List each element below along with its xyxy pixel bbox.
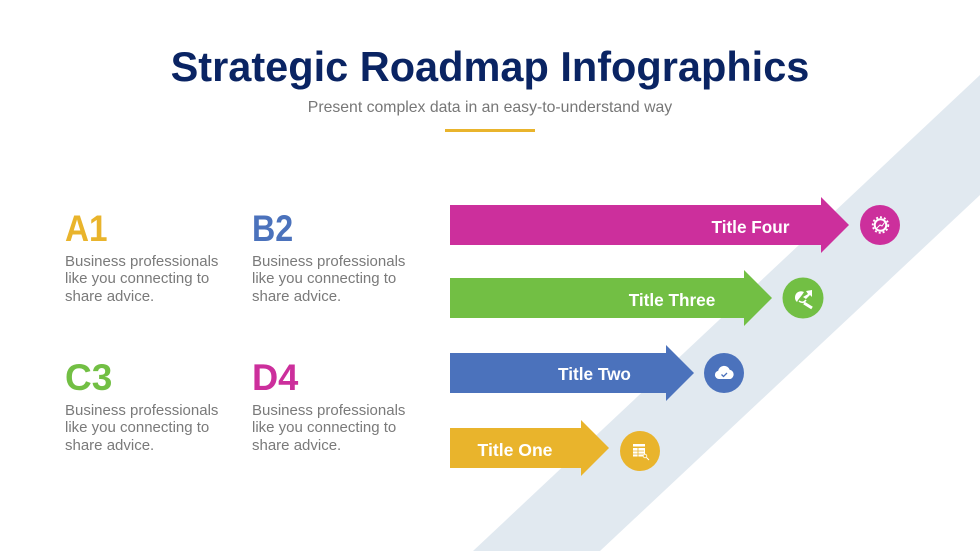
- arrow: Title Four: Title Four: [712, 217, 790, 237]
- text block: D4: share advice.: [252, 437, 341, 454]
- arrow: Title Three: [450, 270, 772, 326]
- icon: table search: [620, 431, 660, 471]
- text block: C3: Business professionals: [65, 402, 218, 419]
- text block: C3: like you connecting to: [65, 419, 209, 436]
- text block: C3: share advice.: [65, 437, 154, 454]
- arrow: Title Three: Title Three: [629, 290, 715, 310]
- text block: B2: like you connecting to: [252, 270, 396, 287]
- icon: magnifier: [782, 278, 824, 318]
- text block: B2: [252, 208, 405, 305]
- title underline: [445, 129, 535, 132]
- arrow: Title Four: [450, 197, 849, 253]
- text block: B2: B2: [252, 208, 293, 249]
- subtitle: Present complex data in an easy-to-understand way: [308, 99, 672, 116]
- text block: A1: [65, 208, 218, 305]
- text block: A1: Business professionals: [65, 253, 218, 270]
- icon: gear: [860, 205, 900, 245]
- text block: D4: [252, 357, 405, 454]
- text block: D4: Business professionals: [252, 402, 405, 419]
- title: Strategic Roadmap Infographics: [171, 43, 809, 90]
- arrow: Title Two: [450, 345, 694, 401]
- arrow: Title Two: Title Two: [558, 364, 631, 384]
- icon: cloud check: [704, 353, 744, 393]
- text block: A1: like you connecting to: [65, 270, 209, 287]
- text block: C3: C3: [65, 357, 112, 398]
- text block: B2: Business professionals: [252, 253, 405, 270]
- arrow: Title One: Title One: [478, 440, 553, 460]
- text block: A1: A1: [65, 208, 108, 249]
- text block: A1: share advice.: [65, 288, 154, 305]
- text block: C3: [65, 357, 218, 454]
- arrow: Title One: [450, 420, 609, 476]
- text block: B2: share advice.: [252, 288, 341, 305]
- text block: D4: like you connecting to: [252, 419, 396, 436]
- text block: D4: D4: [252, 357, 298, 398]
